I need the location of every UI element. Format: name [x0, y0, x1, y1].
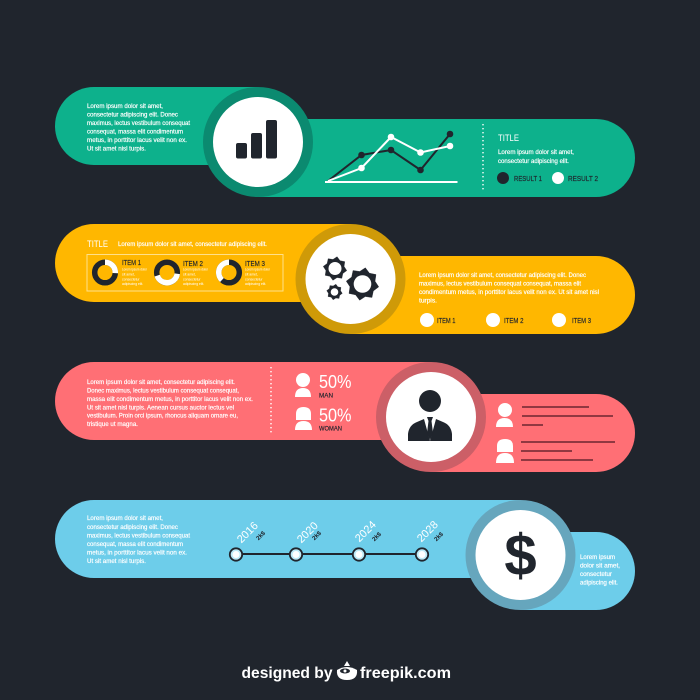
green description: Lorem ipsum dolor sit amet, — [498, 149, 574, 156]
chart legend: RESULT 1 — [514, 176, 542, 183]
blue intro text: Lorem ipsum dolor sit amet, — [87, 515, 163, 522]
blue intro text: metus, in porttitor lacus velit non ex. — [87, 550, 187, 556]
item bullets — [420, 313, 591, 327]
stat: 50% man — [319, 372, 352, 400]
yellow subtitle: Lorem ipsum dolor sit amet, consectetur adipiscing elit. — [118, 241, 267, 248]
yellow body text: turpis. — [419, 298, 437, 304]
green intro text: consequat, massa elit condimentum — [87, 128, 183, 136]
green intro text — [87, 103, 190, 152]
icon: dollar badge: $ — [504, 523, 537, 588]
green right pill — [258, 119, 635, 197]
pink body text: tristique ut magna. — [87, 421, 138, 428]
timeline labels: 2k$ — [434, 531, 445, 543]
green intro text: maximus, lectus vestibulum consequat — [87, 120, 190, 127]
stat: 50% man: MAN — [319, 394, 333, 400]
pink left pill — [55, 362, 431, 440]
chart legend: RESULT 2 — [568, 176, 598, 183]
item 3 text: adipiscing elit. — [245, 282, 266, 286]
item 1 text: Lorem ipsum dolor — [122, 268, 148, 272]
pink body text: massa elit condimentum metus, in porttitor lacus velit non ex. — [87, 396, 253, 403]
pink body text: vestibulum. Proin orci ipsum, rhoncus aliquam ornare eu, — [87, 412, 238, 420]
blue left pill — [55, 500, 520, 578]
timeline labels: 2028 — [415, 519, 441, 545]
footer credit: freepik.com — [360, 665, 451, 682]
item 3 text: ITEM 3 — [245, 259, 265, 268]
green description — [498, 149, 574, 165]
stat: 50% woman — [319, 406, 352, 432]
stat: 50% man: 50% — [319, 372, 352, 392]
donut chart: item 1 — [95, 262, 115, 283]
green intro text: Ut sit amet nisl turpis. — [87, 146, 146, 152]
item 2 text: adipiscing elit. — [183, 282, 204, 286]
item 2 text — [183, 259, 209, 286]
item 1 text — [122, 258, 148, 286]
green left pill — [55, 87, 258, 165]
panel: green analytics banner — [55, 87, 635, 197]
yellow body text: condimentum metus, in porttitor lacus velit non ex. Ut sit amet nisl — [419, 289, 599, 296]
yellow title: TITLE — [87, 239, 108, 250]
blue intro text: Ut sit amet nisl turpis. — [87, 558, 146, 565]
icon: woman — [295, 407, 312, 430]
pink right pill — [431, 394, 635, 472]
timeline labels: 2020 — [295, 520, 321, 546]
item 1 text: sit amet, — [122, 272, 135, 276]
list lines 1 — [522, 407, 613, 425]
yellow right pill — [350, 256, 635, 334]
blue right pill — [520, 532, 635, 610]
icon: list woman — [496, 439, 514, 463]
footer credit: designed by — [242, 665, 333, 682]
item 1 text: adipiscing elit. — [122, 282, 143, 286]
timeline labels: 2k$ — [372, 531, 383, 543]
item 2 text: consectetur — [183, 277, 201, 281]
pink body text: Ut sit amet nisl turpis. Aenean cursus auctor lectus vel — [87, 404, 234, 411]
item 3 text: sit amet, — [245, 272, 258, 276]
icon: list man — [496, 403, 513, 427]
blue intro text: consequat, massa elit condimentum — [87, 541, 183, 548]
pink body text: Donec maximus, lectus vestibulum consequat consequat, — [87, 388, 239, 394]
timeline — [230, 519, 445, 561]
timeline labels: 2k$ — [312, 530, 323, 542]
panel: pink people banner — [55, 362, 635, 472]
green intro text: metus, in porttitor lacus velit non ex. — [87, 137, 187, 144]
line chart — [325, 131, 458, 183]
pink body text: Lorem ipsum dolor sit amet, consectetur adipiscing elit. — [87, 379, 235, 386]
blue side text: dolor sit amet, — [580, 563, 620, 570]
item 2 text: sit amet, — [183, 272, 196, 276]
yellow body text — [419, 272, 599, 304]
item 3 text — [245, 259, 271, 286]
list lines 2 — [521, 442, 615, 460]
blue side text — [580, 554, 620, 586]
item 2 text: Lorem ipsum dolor — [183, 268, 209, 272]
item 1 text: ITEM 1 — [122, 258, 141, 267]
timeline labels — [235, 519, 445, 546]
green title: TITLE — [498, 133, 519, 143]
blue side text: consectetur — [580, 571, 612, 578]
item 2 text: ITEM 2 — [183, 259, 203, 268]
item 3 text: consectetur — [245, 277, 263, 281]
blue side text: Lorem ipsum — [580, 554, 615, 561]
donut chart: item 2 — [157, 262, 177, 283]
yellow body text: maximus, lectus vestibulum consequat consequat, massa elit — [419, 281, 581, 288]
panel: yellow process banner — [55, 224, 635, 334]
green intro text: Lorem ipsum dolor sit amet, — [87, 103, 163, 110]
blue intro text: maximus, lectus vestibulum consequat — [87, 532, 190, 540]
footer credit — [242, 661, 451, 682]
icon: dollar badge — [466, 500, 576, 610]
timeline labels: 2k$ — [256, 530, 267, 542]
green description: consectetur adipiscing elit. — [498, 158, 569, 165]
icon: businessman badge — [376, 362, 486, 472]
blue intro text: consectetur adipiscing elit. Donec — [87, 524, 178, 531]
yellow left pill — [55, 224, 350, 302]
icon: gears badge — [296, 224, 406, 334]
item 1 text: consectetur — [122, 277, 140, 281]
icon: man — [295, 373, 311, 397]
item 3 text: Lorem ipsum dolor — [245, 268, 271, 272]
stat: 50% woman: WOMAN — [319, 426, 342, 432]
timeline labels: 2024 — [353, 519, 379, 545]
timeline labels: 2016 — [235, 520, 261, 546]
icon: freepik logo — [337, 661, 357, 680]
yellow body text: Lorem ipsum dolor sit amet, consectetur adipiscing elit. Donec — [419, 272, 586, 279]
blue side text: adipiscing elit. — [580, 580, 618, 586]
blue intro text — [87, 515, 190, 565]
item bullets: ITEM 2 — [504, 318, 524, 325]
green intro text: consectetur adipiscing elit. Donec — [87, 112, 178, 118]
stat: 50% woman: 50% — [319, 406, 352, 426]
panel: blue finance banner — [55, 500, 635, 610]
chart legend — [497, 172, 598, 184]
pink body text — [87, 379, 253, 428]
donut chart: item 3 — [219, 262, 239, 283]
icon: bar chart badge — [203, 87, 313, 197]
item bullets: ITEM 3 — [572, 318, 591, 325]
items box with donut charts — [87, 254, 283, 291]
item bullets: ITEM 1 — [437, 318, 456, 325]
